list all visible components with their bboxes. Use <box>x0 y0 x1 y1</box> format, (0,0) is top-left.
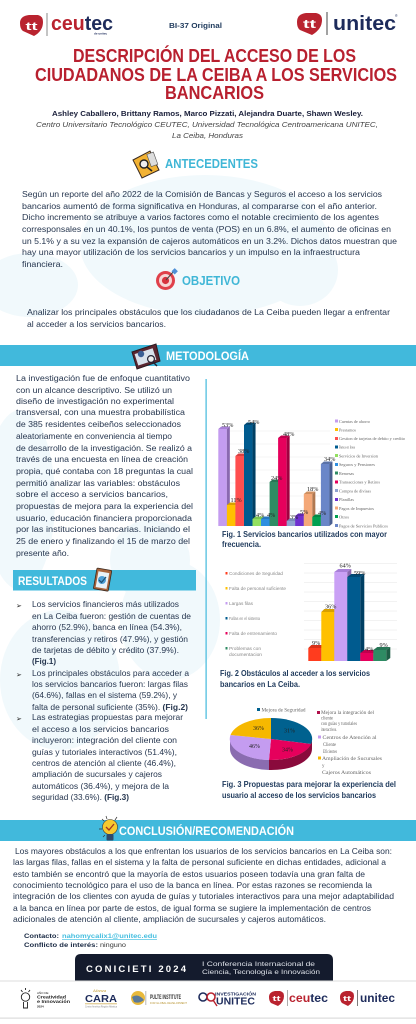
list: resultados: guías y tutoriales interactivos (51.4%), <box>32 747 177 757</box>
legend: figure 1: Banca en linea <box>339 445 355 450</box>
title: DESCRIPCIÓN DEL ACCESO DE LOS <box>73 45 356 66</box>
authors: Ashley Caballero, Brittany Ramos, Marco Pizzati, Alejandra Duarte, Shawn Wesley. <box>52 109 363 118</box>
text block: antecedentes: financiera. <box>22 259 63 269</box>
text block: antecedentes: corresponsales en un 40.1%, los puntos de venta (POS) en un 6.8%, el aumento de oficinas en <box>22 224 391 234</box>
band: conclusión: CONCLUSIÓN/RECOMENDACIÓN <box>119 823 294 838</box>
heading: objetivo: OBJETIVO <box>182 273 240 288</box>
header logo: unitec: unitec <box>333 13 396 35</box>
text block: conclusión: las largas filas, fallas en el sistema y la falta de personal suficiente en dichas entidades, adicional a <box>13 857 386 867</box>
authors <box>36 109 378 140</box>
header logo: ceutec <box>20 13 113 36</box>
text block: metodología: diseño de investigación no experimental <box>16 396 174 406</box>
list: resultados: Los servicios financieros más utilizados <box>32 599 180 609</box>
bar chart: figure 2 <box>304 562 397 661</box>
list: resultados: ➢ <box>16 672 22 679</box>
conference banner: Ciencia, Tecnología e Innovación <box>202 969 320 976</box>
legend: figure 2: Fallas en el sistema <box>229 616 260 621</box>
text block: metodología: transversal, con una muestra probabilística <box>16 407 185 417</box>
legend: figure 1: Compra de divisas <box>339 488 371 493</box>
list: resultados: falta de personal suficiente (35%). (Fig.2) <box>32 702 188 712</box>
bar chart: figure 1: 34% <box>324 456 335 463</box>
pie chart: figure 3: 31% <box>284 728 295 734</box>
list: resultados: ahorro (52.9%), banca en línea (54.3%), <box>32 622 182 632</box>
text block: objetivo: Analizar los principales obstáculos que los ciudadanos de La Ceiba pueden llegar a enfrentar <box>27 307 390 317</box>
text block: conclusión: esto también se encontró que la mayoría de estos usuarios poseen todavía una gran falta de <box>13 869 365 879</box>
bar chart: figure 1: 4% <box>318 510 326 517</box>
legend: figure 1: Otros <box>339 515 349 520</box>
logo: CARA: CARA <box>85 993 117 1005</box>
footer logo strip <box>0 980 416 1019</box>
legend: figure 3: Cajeros Automáticos <box>322 771 371 776</box>
caption: figure 3: usuario al acceso de los servicios bancarios <box>222 791 377 800</box>
legend: figure 3: Mejora de Seguridad <box>262 708 306 714</box>
logo: unitec small <box>340 990 395 1006</box>
legend: figure 1: Remesas <box>339 471 354 476</box>
logo: Pulte Institute: FOR GLOBAL DEVELOPMENT <box>150 1001 187 1005</box>
logo: Investigación UNITEC <box>199 992 256 1008</box>
pie chart: figure 3: 46% <box>249 743 260 750</box>
legend: figure 3: Ampliación de Sucursales <box>322 757 382 762</box>
list: resultados: (64.6%), fallas en el sistema (59.2%), y <box>32 690 178 700</box>
legend: figure 3: Cliente <box>323 743 337 748</box>
text block: conclusión <box>13 846 394 924</box>
contact <box>24 933 157 949</box>
legend: figure 3: interactivos. <box>321 728 337 733</box>
text block: metodología: de desarrollo de la investigación. Se realizó a <box>16 443 192 453</box>
logo: CARA <box>85 988 118 1008</box>
legend: figure 1: Gestion de tarjetas de debito y credito <box>339 436 406 441</box>
header logo: ceutec: de unitec <box>94 32 108 36</box>
text block: metodología: propuestas de mejora para la experiencia del <box>16 501 193 511</box>
bar chart: figure 1: 18% <box>307 486 318 493</box>
conference banner: I Conferencia Internacional de <box>202 961 315 968</box>
list: resultados: ➢ <box>16 716 22 723</box>
list: resultados: transferencias y retiros (47.9%), y gestión <box>32 634 188 644</box>
band: conclusión <box>0 820 416 841</box>
legend: figure 1 <box>335 419 406 528</box>
icon: clipboard <box>93 568 112 591</box>
logo: año de creatividad: e Innovación <box>37 999 70 1004</box>
text block: conclusión: conocimiento tecnológico para el uso de la banca en línea. Por estas razones se recomienda la <box>13 880 372 890</box>
text block: metodología: de 385 residentes ceibeños seleccionados <box>16 419 182 429</box>
bar chart: figure 1: 4% <box>267 512 275 519</box>
legend: figure 2: Falta de entrenamiento <box>229 631 278 636</box>
bar chart: figure 2: 9% <box>312 640 320 647</box>
conference banner: CONICIETI 2024 <box>86 964 187 975</box>
text block: metodología: propia, qué contaba con 18 preguntas la cual <box>16 466 193 476</box>
bar chart: figure 2: 59% <box>354 570 365 577</box>
logo: Pulte Institute <box>131 991 187 1005</box>
bar chart: figure 1: 11% <box>230 497 242 504</box>
caption: figure 1 <box>222 530 387 549</box>
bar chart: figure 2: 9% <box>380 642 388 649</box>
caption: figure 3: Fig. 3 Propuestas para mejorar la experiencia del <box>222 780 396 789</box>
pie chart: figure 3 <box>230 718 312 770</box>
legend: figure 2: documentacion <box>229 652 263 657</box>
text block: metodología: usuario, educación financiera proporcionada <box>16 513 192 523</box>
legend: figure 3: Eficientes <box>323 750 337 755</box>
text block: conclusión: Los mayores obstáculos a los que enfrentan los usuarios de los servicios bancarios en La Ceiba son: <box>15 846 392 856</box>
logo: ceutec small: ceutec <box>289 991 328 1005</box>
legend: figure 1: Prestamos <box>339 428 356 432</box>
legend: figure 1: Pagos de Impuestos <box>339 506 374 511</box>
bar chart: figure 1: 4% <box>256 512 264 519</box>
bar chart: figure 1: 48% <box>283 431 294 438</box>
text block: metodología: La investigación fue de enfoque cuantitativo <box>16 373 190 383</box>
conference banner <box>75 954 333 981</box>
contact: Contacto: <box>24 933 59 940</box>
text block: conclusión: a la banca en línea por parte de estos, de igual forma se sugiere la implementación de centros <box>13 903 372 913</box>
bar chart: figure 1 <box>218 419 335 526</box>
bar chart: figure 2: 4% <box>365 646 373 653</box>
text block: conclusión: integración de los clientes con ayuda de guías y tutoriales interactivos para una mejor adaptabilidad <box>13 891 394 901</box>
list: resultados: Los principales obstáculos para acceder a <box>32 668 189 678</box>
title <box>35 45 397 103</box>
text block: objetivo: al acceder a los servicios bancarios. <box>27 319 166 329</box>
band: resultados <box>13 570 196 590</box>
legend: figure 2: Condiciones de Seguridad <box>229 571 284 576</box>
logo: año de creatividad: Creatividad <box>37 994 66 1000</box>
legend: figure 1: Pagos de Servicios Publicos <box>339 523 388 528</box>
list: resultados: ➢ <box>16 603 22 610</box>
legend: figure 1: Cuentas de ahorro <box>339 419 371 424</box>
pie chart: figure 3: 36% <box>253 725 264 732</box>
text block: antecedentes <box>22 189 397 269</box>
bar chart: figure 1: 3% <box>290 514 298 521</box>
logo: año de creatividad <box>21 988 70 1008</box>
list: resultados: ampliación de sucursales y cajeros <box>32 769 163 779</box>
list: resultados: de tarjetas de débito y crédito (37.9%). <box>32 645 179 655</box>
heading: antecedentes: ANTECEDENTES <box>165 156 258 171</box>
list: resultados: en La Ceiba fueron: gestión de cuentas de <box>32 611 191 621</box>
text block: metodología: aleatoriamente en conveniencia al tiempo <box>16 431 172 441</box>
legend: figure 2: Largas filas <box>229 601 254 606</box>
caption: figure 1: frecuencia. <box>222 540 261 549</box>
text block: metodología: permitió analizar las variables: obstáculos <box>16 478 181 488</box>
bar chart: figure 1: 5% <box>300 509 308 516</box>
legend: figure 2 <box>226 571 287 657</box>
caption: figure 2 <box>220 669 371 689</box>
icon: target <box>156 268 178 290</box>
text block: antecedentes: un 5.1% y a su vez la expansión de cajeros automáticos en un 3.2%. Dichos datos muestran que <box>22 236 397 246</box>
logo: ceutec small: tt <box>272 996 282 1003</box>
text block: objetivo <box>27 307 390 329</box>
authors: La Ceiba, Honduras <box>172 131 243 140</box>
legend: figure 3: Mejora la integración del <box>321 711 375 716</box>
contact: Conflicto de interés: <box>24 942 98 949</box>
header logo: unitec <box>297 12 398 35</box>
legend: figure 1: Planillas <box>339 497 354 502</box>
list: resultados: incluyeron: integración del cliente con <box>32 735 177 745</box>
bar chart: figure 1: 24% <box>271 475 282 482</box>
caption: figure 2: Fig. 2 Obstáculos al acceder a los servicios <box>220 669 371 678</box>
icon: light bulb <box>99 816 118 840</box>
bar chart: figure 1: 54% <box>248 419 259 426</box>
header logo: ceutec: tt <box>26 21 38 33</box>
text block: conclusión: adicionales de atención al cliente, ampliación de sucursales y cajeros automáticos. <box>13 914 326 924</box>
list: resultados <box>16 599 191 802</box>
pie chart: figure 3: 34% <box>282 746 293 754</box>
icon: book with magnifier <box>132 344 160 369</box>
text block: metodología: por las instituciones bancarias. Iniciando el <box>16 524 190 534</box>
list: resultados: seguridad (33.6%). (Fig.3) <box>32 792 129 802</box>
logo: año de creatividad: 2024 <box>37 1004 44 1008</box>
bar chart: figure 1: 38% <box>238 448 249 455</box>
text block: antecedentes: bancarios aumentó de forma significativa en Honduras, al compararse con el año anterior. <box>22 201 377 211</box>
list: resultados: centros de atención al cliente (46.4%), <box>32 758 176 768</box>
header logo: ceutec: ceutec <box>51 13 113 35</box>
list: resultados: automáticos (36.4%), y mejora de la <box>32 781 169 791</box>
text block: antecedentes: Según un reporte del año 2022 de la Comisión de Bancas y Seguros el acceso a los servicios <box>22 189 383 199</box>
text block: antecedentes: Dicho incremento se atribuye a varios factores como el notable crecimiento de los agentes <box>22 212 380 222</box>
header logo: unitec: ® <box>395 14 398 18</box>
list: resultados: los servicios bancarios fueron: largas filas <box>32 679 189 689</box>
contact: ninguno <box>100 942 126 949</box>
contact: nahomycalix1@unitec.edu <box>62 933 157 940</box>
list: resultados: el acceso a los servicios bancarios <box>32 724 170 734</box>
caption: figure 1: Fig. 1 Servicios bancarios utilizados con mayor <box>222 530 387 539</box>
text block: metodología: sobre el acceso a servicios bancarios, <box>16 489 168 499</box>
legend: figure 3 <box>257 708 382 776</box>
logo: CARA: Alianza <box>92 988 107 993</box>
caption: figure 3 <box>222 780 396 800</box>
band: metodología: METODOLOGÍA <box>166 348 249 363</box>
authors: Centro Universitario Tecnológico CEUTEC, Universidad Tecnológica Centroamericana UNITEC, <box>36 120 378 129</box>
legend: figure 3: Centros de Atención al <box>322 736 377 741</box>
list: resultados: (Fig.1) <box>32 656 56 666</box>
logo: unitec small: unitec <box>360 991 395 1005</box>
logo: ceutec small <box>269 990 328 1006</box>
legend: figure 2: Problemas con <box>229 646 262 651</box>
legend: figure 3: con guías y tutoriales <box>321 722 357 727</box>
logo: Investigación UNITEC: UNITEC <box>216 996 255 1008</box>
legend: figure 2: Falta de personal suficiente <box>229 586 287 591</box>
band: resultados: RESULTADOS <box>18 574 87 588</box>
legend: figure 1: Servicios de Inversion <box>339 454 379 458</box>
icon: folder with magnifier <box>133 151 159 178</box>
bar chart: figure 2: 64% <box>340 562 351 570</box>
text block: metodología <box>16 373 193 558</box>
bar chart: figure 1: 53% <box>222 422 233 429</box>
legend: figure 3: cliente <box>321 716 334 722</box>
text block: metodología: 25 de enero y finalizando el 15 de marzo del <box>16 536 190 546</box>
text block: metodología: presente año. <box>16 548 69 558</box>
text block: antecedentes: hay una mayor utilización de los servicios bancarios y un impulso en la infraestructura <box>22 247 360 257</box>
title: BANCARIOS <box>165 83 264 103</box>
legend: figure 1: Transacciones y Retiros <box>339 480 380 485</box>
text block: metodología: través de una encuesta en línea de creación <box>16 454 188 464</box>
list: resultados: Las estrategias propuestas para mejorar <box>32 712 183 722</box>
logo: Pulte Institute: PULTE INSTITUTE <box>150 995 181 1001</box>
header logo: unitec: tt <box>303 19 316 31</box>
band: metodología <box>0 345 416 366</box>
legend: figure 3: y <box>322 764 325 769</box>
caption: figure 2: bancarios en La Ceiba. <box>220 680 300 689</box>
legend: figure 1: Seguros y Pensiones <box>339 462 375 467</box>
poster code: BI-37 Original <box>169 21 222 30</box>
bar chart: figure 2: 36% <box>325 604 336 610</box>
logo: CARA: Centro América Región Atlántica <box>85 1006 118 1008</box>
logo: año de creatividad: AÑO DE <box>37 990 49 995</box>
logo: unitec small: tt <box>343 996 352 1003</box>
text block: metodología: con un alcance descriptivo. Se utilizó un <box>16 385 172 395</box>
logo: Investigación UNITEC: INVESTIGACIÓN <box>215 992 256 996</box>
